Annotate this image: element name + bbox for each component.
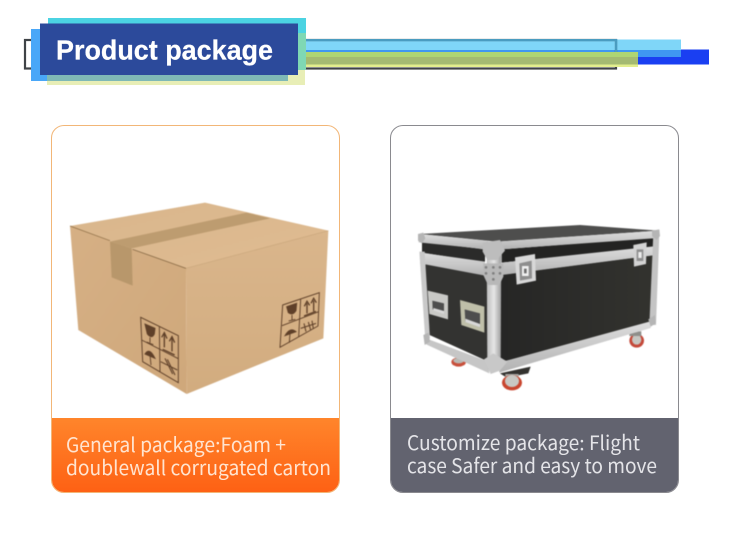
decorative bar: teal frame end: [615, 39, 617, 52]
caption bar: grey: [391, 418, 678, 492]
front latch: right: [633, 242, 647, 267]
box front seam: [133, 249, 186, 268]
corner fitting: top: [483, 240, 505, 260]
bottom rail: left: [424, 338, 489, 373]
top rail: left: [419, 234, 488, 249]
title backing: teal overlap: [47, 75, 288, 81]
case top: [420, 225, 658, 242]
front latch: left: [515, 254, 536, 285]
box right seam: [186, 231, 328, 268]
top rail: front: [500, 231, 658, 249]
title backing: pale yellow: [47, 33, 305, 85]
box top: [70, 203, 328, 268]
case left face: [423, 263, 488, 362]
panel: general package: [51, 125, 340, 493]
side handle: rear: [428, 291, 448, 319]
illustration: flight case: [418, 224, 660, 392]
right vertical rail: [649, 233, 659, 325]
caption text: [407, 427, 657, 479]
mid rail: left: [420, 253, 485, 276]
decorative bar: olive inner strip: [306, 57, 638, 65]
header banner: [24, 18, 709, 85]
mid rail: front: [502, 246, 657, 275]
decorative bar: sky blue: [306, 40, 681, 57]
decorative bar: pale yellow strip: [306, 64, 638, 67]
decorative bar: outline frame: [25, 40, 616, 68]
caption text: Customize package: Flight: [407, 427, 640, 456]
corner fitting: bottom: [484, 353, 507, 374]
tape flap: [110, 242, 133, 286]
wheels: [451, 331, 644, 390]
corner fitting: studs: [483, 263, 503, 285]
title backing: cyan: [48, 18, 306, 33]
box seam: [70, 226, 110, 241]
title backing: cyan right edge: [298, 33, 306, 70]
bottom rail: front: [499, 321, 652, 373]
box right face: [186, 231, 328, 394]
illustration: cardboard box: [69, 202, 329, 394]
tape on top: [110, 213, 270, 248]
caption bar: orange: [52, 418, 339, 492]
decorative bar: sky blue overlay on frame: [306, 39, 617, 41]
side handle: front: [460, 300, 484, 333]
case front face: [499, 255, 654, 363]
caption text: doublewall corrugated carton: [66, 452, 331, 481]
corner fittings: small: [418, 229, 660, 345]
caption text: [66, 429, 331, 481]
title: Product package: [56, 34, 273, 66]
label: left face: [141, 317, 178, 383]
caption text: case Safer and easy to move: [407, 450, 657, 479]
box left face: [70, 226, 187, 394]
decorative bar: blue strip: [306, 50, 681, 57]
left vertical rail: [419, 252, 430, 341]
panel: customize package: [390, 125, 679, 493]
title plate: [40, 24, 298, 75]
center vertical rail: [487, 242, 501, 370]
title backing: light blue: [31, 29, 288, 81]
decorative bar: royal blue: [600, 50, 709, 64]
lid left: [422, 242, 485, 263]
lid front: [502, 237, 656, 263]
label: right face: [280, 293, 319, 347]
decorative bar: green: [306, 52, 638, 67]
caption text: General package:Foam +: [66, 429, 286, 458]
